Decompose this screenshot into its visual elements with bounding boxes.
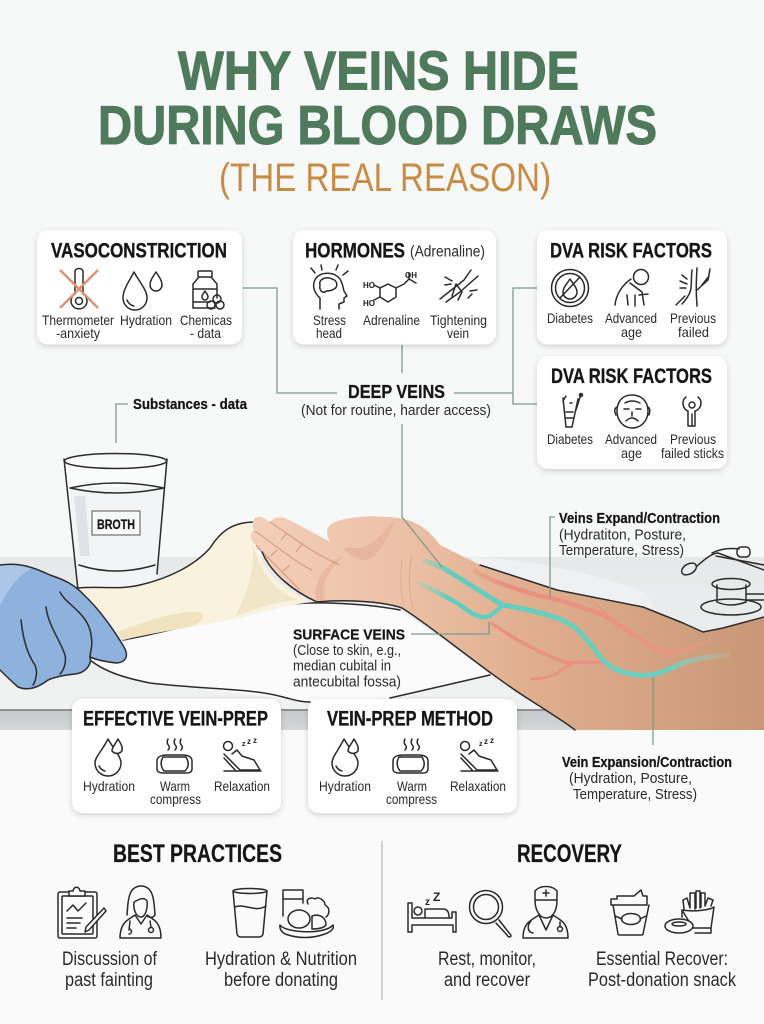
towel bbox=[78, 522, 313, 640]
icon: warm compress bbox=[393, 739, 428, 773]
labels: Warm bbox=[397, 778, 427, 794]
label: surface veins: (Close to skin, e.g., bbox=[293, 643, 401, 659]
finger creases bbox=[255, 522, 340, 590]
icon: drink and food plate bbox=[280, 890, 333, 938]
labels: Rest, monitor, bbox=[438, 949, 536, 970]
icon: female doctor bbox=[120, 886, 161, 938]
labels bbox=[62, 949, 357, 991]
labels bbox=[42, 312, 232, 341]
icon: bed: z bbox=[425, 897, 430, 908]
connector lines over arm bbox=[402, 424, 653, 745]
icon: hydration drop bbox=[123, 272, 162, 310]
labels: and recover bbox=[444, 970, 531, 991]
icon: adrenaline molecule: HO bbox=[363, 299, 375, 308]
wrist creases bbox=[401, 556, 414, 612]
card: vein-prep method bbox=[308, 699, 517, 813]
card: DVA risk factors 2 bbox=[537, 356, 727, 469]
heading: EFFECTIVE VEIN-PREP bbox=[83, 708, 268, 730]
labels: failed sticks bbox=[661, 445, 724, 461]
labels: Diabetes bbox=[547, 310, 593, 326]
icon: test tube bbox=[563, 394, 582, 427]
heading: DVA RISK FACTORS bbox=[550, 240, 712, 262]
icon: hydration bbox=[95, 739, 122, 776]
label: surface veins: median cubital in bbox=[293, 658, 391, 674]
icon: relaxation: z bbox=[242, 741, 246, 748]
labels: Hydration bbox=[319, 778, 371, 794]
label: surface veins: antecubital fossa) bbox=[293, 674, 401, 690]
connector lines bbox=[116, 288, 537, 443]
labels: failed bbox=[678, 324, 709, 340]
labels: compress bbox=[150, 791, 201, 807]
glove bbox=[0, 564, 126, 689]
icon: adrenaline molecule: OH bbox=[405, 271, 417, 280]
labels: Hydration bbox=[120, 312, 172, 328]
labels bbox=[83, 778, 270, 807]
panel: best practices bbox=[58, 840, 357, 991]
label: veins expand: Temperature, Stress) bbox=[559, 543, 684, 559]
icon: adrenaline molecule: HO bbox=[363, 281, 375, 290]
icon: hydration bbox=[332, 739, 358, 776]
arm with veins bbox=[251, 516, 764, 730]
card: DVA risk factors 1 bbox=[537, 230, 727, 344]
labels: Stress bbox=[313, 312, 346, 328]
panel: recovery bbox=[408, 840, 736, 991]
labels: Previous bbox=[670, 431, 716, 447]
labels: - data bbox=[190, 325, 221, 341]
pillow bbox=[90, 556, 653, 702]
divider bbox=[382, 841, 383, 1000]
labels: Adrenaline bbox=[363, 312, 420, 328]
table scene background bbox=[0, 557, 764, 730]
label: vein expansion: Temperature, Stress) bbox=[573, 787, 697, 803]
labels: Essential Recover: bbox=[596, 949, 728, 970]
labels bbox=[547, 431, 724, 461]
label: substances: Substances - data bbox=[133, 397, 248, 413]
heading: VEIN-PREP METHOD bbox=[327, 708, 493, 730]
label: deep veins bbox=[301, 382, 491, 419]
labels: vein bbox=[447, 325, 469, 341]
labels: Thermometer bbox=[42, 312, 114, 328]
lower page background bbox=[0, 730, 764, 1024]
icon: adrenaline molecule bbox=[363, 271, 417, 308]
icon: tightening vein bbox=[440, 270, 478, 302]
labels: age bbox=[621, 445, 642, 461]
labels: age bbox=[621, 324, 642, 340]
label: vein expansion: Vein Expansion/Contraction bbox=[562, 755, 732, 771]
stethoscope bbox=[680, 547, 764, 615]
icon: relaxation: z bbox=[253, 736, 257, 745]
title: (THE REAL REASON) bbox=[219, 156, 551, 200]
label: veins expand bbox=[559, 511, 720, 559]
pink arteries bbox=[473, 570, 715, 679]
icon: water glass bbox=[233, 888, 267, 937]
icon: raised arms person bbox=[683, 397, 701, 426]
labels: Previous bbox=[670, 310, 716, 326]
card: hormones bbox=[293, 230, 496, 344]
labels bbox=[319, 778, 506, 807]
labels: Chemicas bbox=[180, 312, 232, 328]
label: surface veins bbox=[293, 626, 405, 690]
icon: magnifier bbox=[470, 890, 511, 937]
icon: relaxation: z bbox=[484, 737, 488, 746]
heading: RECOVERY bbox=[517, 840, 622, 868]
title bbox=[98, 40, 657, 200]
label: surface veins: SURFACE VEINS bbox=[293, 626, 405, 644]
title: DURING BLOOD DRAWS bbox=[98, 94, 657, 156]
icon: relaxation: z bbox=[247, 737, 251, 746]
labels bbox=[547, 310, 716, 340]
icon: bed bbox=[408, 890, 456, 932]
labels: Hydration & Nutrition bbox=[205, 949, 357, 970]
labels: past fainting bbox=[65, 970, 153, 991]
heading: DVA RISK FACTORS bbox=[551, 365, 712, 388]
icon: relaxation: z bbox=[490, 736, 494, 745]
label: veins expand: (Hydratiton, Posture, bbox=[559, 528, 686, 544]
icon: relaxation bbox=[224, 736, 261, 771]
icon: clipboard bbox=[58, 887, 106, 938]
icon: old face bbox=[615, 395, 650, 428]
forearm and hand bbox=[251, 516, 764, 730]
icon: male doctor bbox=[523, 886, 568, 938]
heading: HORMONES bbox=[305, 240, 405, 262]
label: veins expand: Veins Expand/Contraction bbox=[559, 511, 720, 527]
labels: -anxiety bbox=[56, 325, 100, 341]
palm shading bbox=[316, 520, 395, 602]
teal veins bbox=[418, 560, 730, 675]
labels: compress bbox=[386, 791, 437, 807]
label: broth: BROTH bbox=[97, 517, 135, 532]
heading: (Adrenaline) bbox=[410, 244, 485, 260]
icon: stress head bbox=[311, 265, 348, 309]
heading bbox=[305, 240, 485, 262]
icon: chemicals bottle bbox=[193, 271, 224, 309]
label: vein expansion bbox=[562, 755, 732, 803]
icon: no diabetes bbox=[552, 270, 588, 306]
icon: thermometer crossed bbox=[60, 269, 98, 309]
icon: fries and donut bbox=[665, 891, 714, 933]
icon: previous failed vein bbox=[676, 268, 710, 306]
icon: advanced age bbox=[615, 270, 648, 306]
labels: Hydration bbox=[83, 778, 135, 794]
labels: Post-donation snack bbox=[588, 970, 736, 991]
title: WHY VEINS HIDE bbox=[178, 40, 579, 102]
card: effective vein-prep bbox=[72, 699, 281, 813]
label: deep veins: DEEP VEINS bbox=[348, 382, 445, 402]
glass of broth bbox=[64, 454, 167, 590]
icon: relaxation bbox=[460, 736, 498, 771]
labels: Advanced bbox=[605, 431, 657, 447]
icon: warm compress bbox=[157, 739, 192, 773]
icon: cup bbox=[611, 890, 649, 935]
labels: before donating bbox=[224, 970, 338, 991]
label: vein expansion: (Hydration, Posture, bbox=[569, 771, 692, 787]
labels: Advanced bbox=[605, 310, 657, 326]
labels: Diabetes bbox=[547, 431, 593, 447]
icon: relaxation: z bbox=[479, 741, 483, 748]
label: deep veins: (Not for routine, harder access) bbox=[301, 403, 491, 419]
labels bbox=[438, 949, 736, 991]
labels: Relaxation bbox=[214, 778, 270, 794]
labels: Relaxation bbox=[450, 778, 506, 794]
heading: VASOCONSTRICTION bbox=[51, 240, 227, 262]
heading: BEST PRACTICES bbox=[113, 840, 282, 868]
card: vasoconstriction bbox=[37, 230, 242, 344]
labels bbox=[313, 312, 487, 341]
icon: bed: Z bbox=[433, 890, 440, 904]
labels: Discussion of bbox=[62, 949, 158, 970]
labels: Tightening bbox=[430, 312, 487, 328]
labels: Warm bbox=[160, 778, 190, 794]
labels: head bbox=[316, 325, 342, 341]
